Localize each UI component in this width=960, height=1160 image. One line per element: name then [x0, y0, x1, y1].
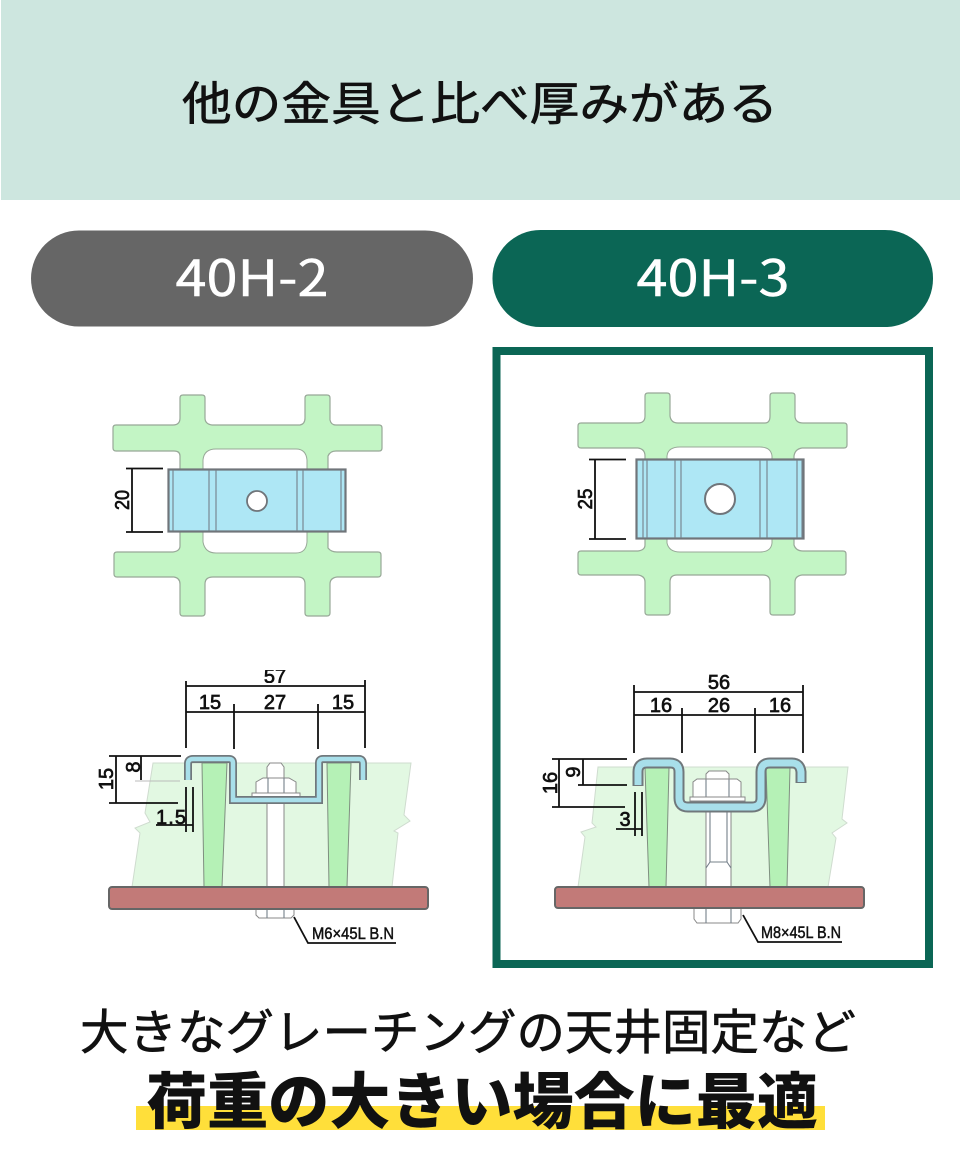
- caption line 1: 大きなグレーチングの天井固定など: [80, 993, 856, 1063]
- channel clamp: [638, 763, 801, 807]
- top dimensions: 16: [650, 695, 672, 717]
- bolt hole: [705, 484, 735, 514]
- side dimensions: 3: [619, 809, 631, 831]
- dimension: 20: 20: [112, 490, 134, 510]
- side dimensions: 1.5: [156, 807, 186, 829]
- grating bars: [202, 763, 227, 887]
- side dimensions: [96, 756, 193, 832]
- concrete body: [132, 763, 411, 887]
- bolt callout: M6×45L B.N: [312, 924, 394, 943]
- base plate: [555, 887, 864, 908]
- bolt callout: M8×45L B.N: [761, 923, 841, 942]
- caption line 2 with highlight: 荷重の大きい場合に最適: [146, 1052, 818, 1141]
- top dimensions: 27: [264, 692, 286, 714]
- pill: 40H-3: [492, 230, 933, 327]
- base plate: [109, 887, 428, 909]
- grid opening: [667, 447, 772, 552]
- top dimensions: [634, 672, 803, 753]
- side dimensions: 15: [96, 768, 118, 790]
- dimension: 25: 25: [575, 488, 597, 510]
- bolt callout: [294, 917, 396, 943]
- grating bars: [645, 768, 669, 887]
- channel clamp: [188, 759, 363, 800]
- plan view: 40H-2: [112, 395, 382, 616]
- header band: [1, 0, 960, 200]
- yellow highlight: [136, 1106, 825, 1130]
- section view: 40H-2: [96, 666, 428, 943]
- side dimensions: 9: [563, 766, 585, 778]
- side dimensions: 8: [123, 761, 145, 773]
- dimension: 25: [575, 459, 626, 539]
- bolt: [252, 763, 300, 918]
- top dimensions: 15: [199, 692, 221, 714]
- title: 他の金具と比べ厚みがある: [182, 68, 778, 134]
- top dimensions: 26: [708, 695, 730, 717]
- top dimensions: 57: [264, 666, 286, 688]
- side dimensions: 16: [540, 772, 562, 794]
- plan view: 40H-3: [575, 393, 847, 615]
- bolt: [690, 771, 745, 923]
- pill: 40H-2: [31, 230, 473, 326]
- top dimensions: 16: [769, 695, 791, 717]
- bolt callout: [743, 915, 842, 942]
- concrete body: [578, 767, 848, 887]
- pill: 40H-2: 40H-2: [176, 239, 328, 311]
- grating grid: [113, 395, 382, 616]
- clamp plate: [636, 460, 804, 538]
- bolt hole: [247, 491, 267, 511]
- clamp plate: [168, 470, 346, 532]
- top dimensions: 15: [332, 692, 354, 714]
- grid opening: [203, 449, 307, 553]
- side dimensions: [540, 759, 642, 836]
- pill: 40H-3: 40H-3: [636, 239, 790, 311]
- top dimensions: 56: [708, 672, 730, 694]
- dimension: 20: [112, 468, 163, 532]
- top dimensions: [186, 666, 365, 749]
- highlight frame around 40H-3: [496, 351, 929, 964]
- grating grid: [578, 393, 847, 615]
- section view: 40H-3: [540, 672, 864, 942]
